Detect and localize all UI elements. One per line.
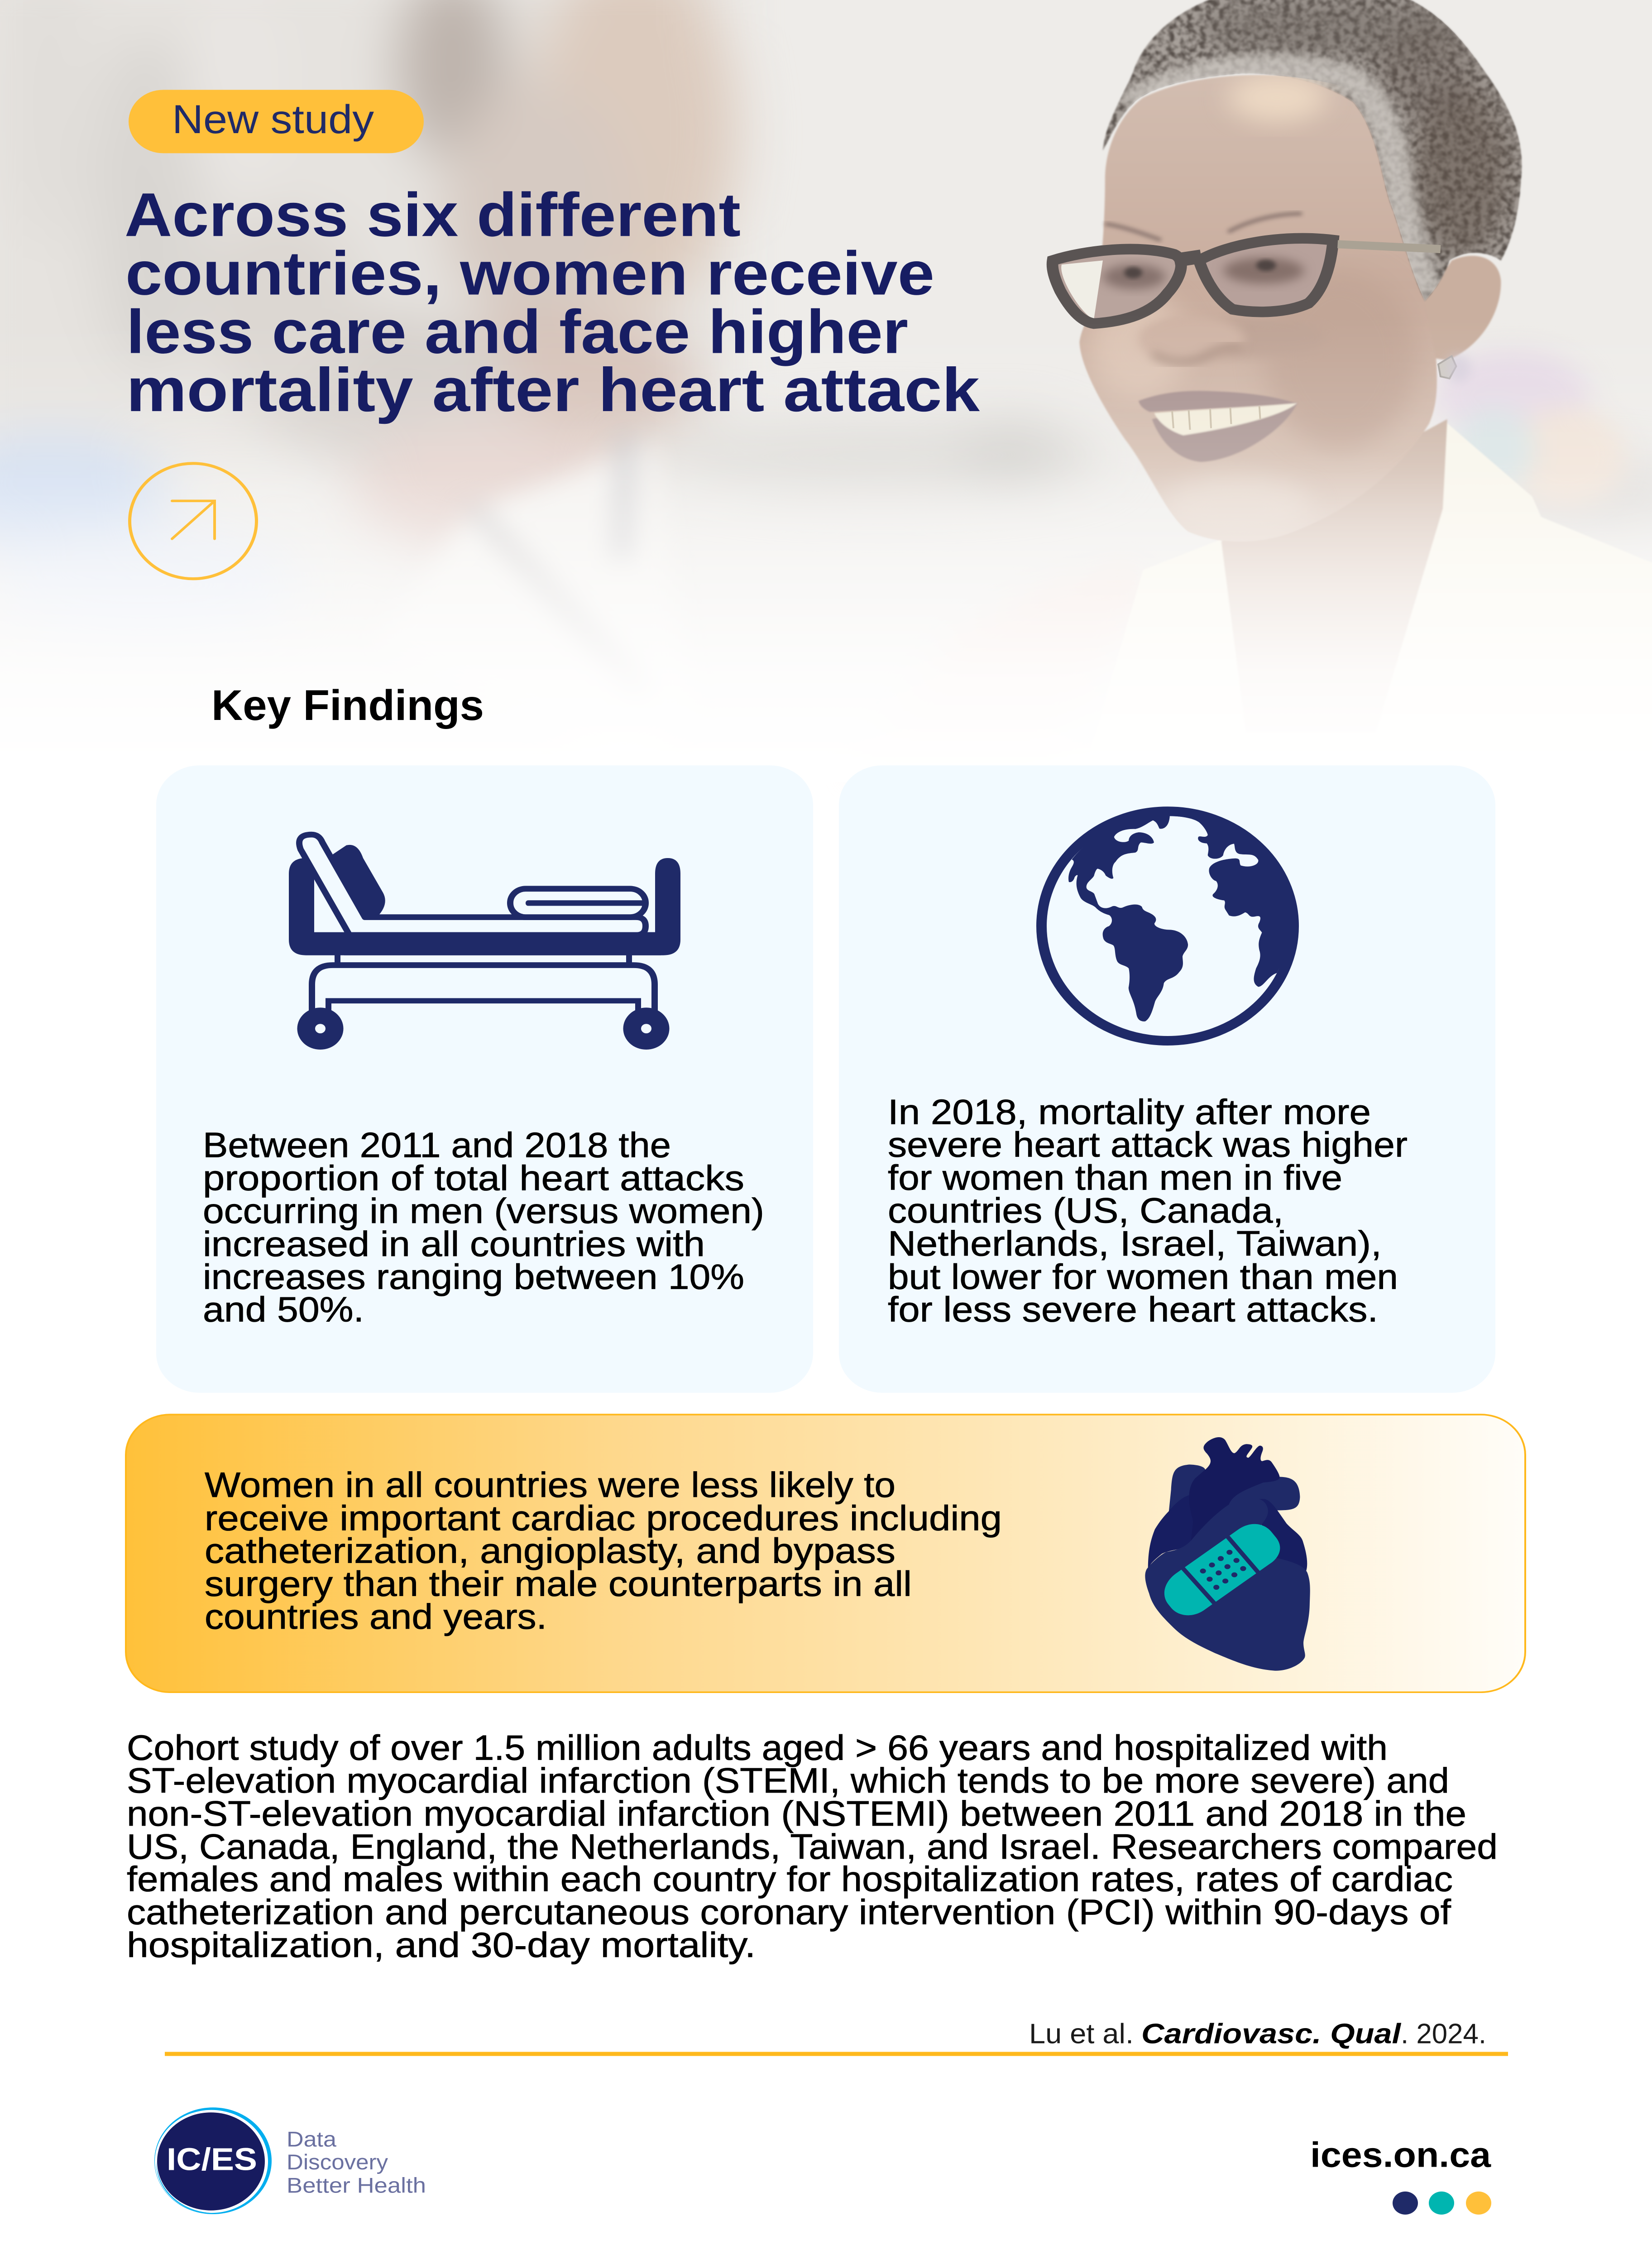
text block: study description: non-ST-elevation myocardial infarction (NSTEMI) between 2011 and 2018 in the [127,1794,1466,1833]
decorative brand dots [1393,2192,1491,2215]
text: mortality comparison: Netherlands, Israel, Taiwan), [888,1224,1382,1263]
text: mortality comparison: for less severe heart attacks. [888,1290,1378,1329]
citation: Cardiovasc. Qual [1141,2018,1402,2049]
hair [1103,0,1522,301]
text: mortality comparison: severe heart attack was higher [888,1125,1408,1165]
text: cardiac procedures: receive important cardiac procedures including [205,1499,1002,1538]
logo tagline: Data [287,2127,336,2151]
text: mortality comparison: In 2018, mortality after more [888,1093,1371,1132]
citation: . 2024. [1401,2018,1486,2049]
jacket [1085,423,1652,769]
title: less care and face higher [126,297,908,366]
website: ices.on.ca [1310,2135,1491,2174]
badge: New study: New study [172,96,374,142]
title: mortality after heart attack [126,355,980,424]
background photo: doctor and smiling patient, faded to white [0,0,1652,783]
logo tagline [287,2127,426,2197]
text: proportion of heart attacks: increases ranging between 10% [203,1257,744,1297]
text: cardiac procedures: surgery than their male counterparts in all [205,1564,912,1604]
ear [1425,256,1501,360]
text block: study description: females and males within each country for hospitalization rates, rates of cardiac [127,1860,1453,1899]
text: proportion of heart attacks: occurring in men (versus women) [203,1192,764,1231]
text block: study description: hospitalization, and 30-day mortality. [127,1926,756,1965]
icon: bandage [1164,1524,1280,1615]
text: mortality comparison: for women than men in five [888,1158,1342,1197]
text: cardiac procedures: countries and years. [205,1597,547,1636]
text: mortality comparison [888,1093,1408,1329]
panel: cardiac procedures callout [126,1415,1525,1692]
icon: globe [1041,811,1294,1041]
mouth [1152,403,1298,462]
text: proportion of heart attacks: proportion of total heart attacks [203,1159,744,1198]
citation [1029,2018,1486,2049]
text block: study description [127,1728,1498,1965]
fade to white [0,0,1652,783]
logo: IC/ES: IC/ES [167,2142,257,2177]
text: proportion of heart attacks: Between 2011 and 2018 the [203,1126,671,1165]
text block: study description: catheterization and percutaneous coronary intervention (PCI) within 90-days of [127,1893,1451,1932]
text: proportion of heart attacks [203,1126,764,1329]
panel: hospital bed finding [156,765,813,1393]
text: proportion of heart attacks: and 50%. [203,1290,364,1329]
title: Across six different [124,181,741,249]
text: proportion of heart attacks: increased in all countries with [203,1224,705,1264]
citation: Lu et al. [1029,2018,1134,2049]
title [124,181,980,424]
panel: global mortality finding [839,765,1495,1393]
face [1080,75,1437,542]
earring [1438,356,1456,379]
lens tint and eyes [1199,238,1333,312]
icon: hospital bed [289,835,680,1050]
text block: study description: US, Canada, England, the Netherlands, Taiwan, and Israel. Researchers compared [127,1827,1498,1866]
text: mortality comparison: countries (US, Canada, [888,1191,1283,1230]
logo: IC/ES [154,2107,272,2214]
icon: heart with bandage [1145,1437,1310,1671]
text: cardiac procedures: Women in all countries were less likely to [205,1466,895,1505]
nose [1139,315,1246,361]
icon: arrow in circle [129,463,256,579]
text: cardiac procedures: catheterization, angioplasty, and bypass [205,1531,895,1571]
heading: Key Findings: Key Findings [211,682,484,729]
text block: study description: ST-elevation myocardial infarction (STEMI, which tends to be more severe) and [127,1761,1449,1800]
text: mortality comparison: but lower for women than men [888,1257,1398,1297]
text block: study description: Cohort study of over 1.5 million adults aged > 66 years and hospitalized with [127,1728,1388,1768]
eyebrows [1105,224,1161,240]
title: countries, women receive [125,239,934,308]
divider line [165,2052,1508,2056]
glasses [1061,260,1103,320]
logo tagline: Discovery [287,2150,388,2174]
text: cardiac procedures [205,1466,1002,1636]
badge: New study [129,90,424,153]
logo tagline: Better Health [287,2173,426,2197]
